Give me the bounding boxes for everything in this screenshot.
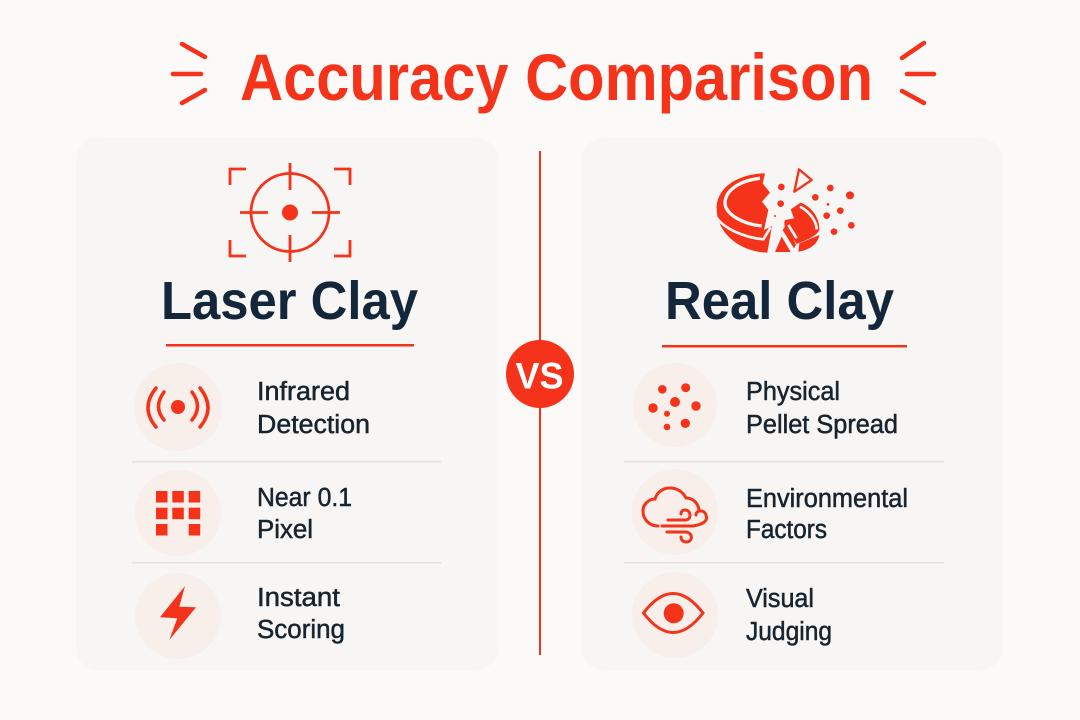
label: near 0.1 pixel: Pixel bbox=[257, 516, 313, 544]
row: environmental factors bbox=[632, 469, 908, 555]
icon: shattered clay target bbox=[716, 169, 855, 253]
label: environmental factors: Factors bbox=[746, 516, 827, 544]
label: physical pellet spread: Pellet Spread bbox=[746, 411, 898, 439]
center divider line bbox=[539, 151, 541, 655]
icon: left burst lines bbox=[173, 44, 205, 103]
icon: pellet dots bbox=[648, 383, 701, 430]
vs badge: VS bbox=[516, 356, 564, 396]
heading: real clay: Real Clay bbox=[665, 271, 894, 331]
label: instant scoring: Instant bbox=[257, 584, 340, 612]
label: visual judging: Judging bbox=[746, 618, 832, 646]
title: Accuracy Comparison bbox=[240, 40, 873, 114]
label: instant scoring: Scoring bbox=[257, 616, 345, 644]
row: instant scoring bbox=[135, 573, 345, 659]
label: physical pellet spread: Physical bbox=[746, 378, 840, 406]
heading underline bbox=[166, 344, 414, 346]
label: environmental factors: Environmental bbox=[746, 485, 908, 513]
icon: right burst lines bbox=[902, 43, 934, 103]
icon: lightning bolt bbox=[160, 586, 196, 640]
label: visual judging: Visual bbox=[746, 585, 814, 613]
label: infrared detection: Detection bbox=[257, 411, 370, 439]
row: physical pellet spread bbox=[633, 363, 898, 447]
icon: infrared signal bbox=[148, 388, 208, 427]
heading: laser clay: Laser Clay bbox=[161, 271, 418, 331]
panel: laser clay bbox=[76, 138, 498, 670]
label: infrared detection: Infrared bbox=[257, 378, 350, 406]
vs badge bbox=[506, 340, 574, 408]
row: visual judging bbox=[632, 572, 832, 658]
icon: eye bbox=[644, 594, 703, 632]
icon: cloud and wind bbox=[643, 488, 707, 542]
heading underline bbox=[662, 345, 907, 348]
row: near 0.1 pixel bbox=[135, 470, 352, 556]
label: near 0.1 pixel: Near 0.1 bbox=[257, 484, 352, 512]
icon: pixel grid bbox=[156, 491, 200, 536]
row: infrared detection bbox=[134, 363, 370, 451]
icon: target crosshair bbox=[230, 163, 350, 262]
panel: real clay bbox=[581, 138, 1003, 670]
